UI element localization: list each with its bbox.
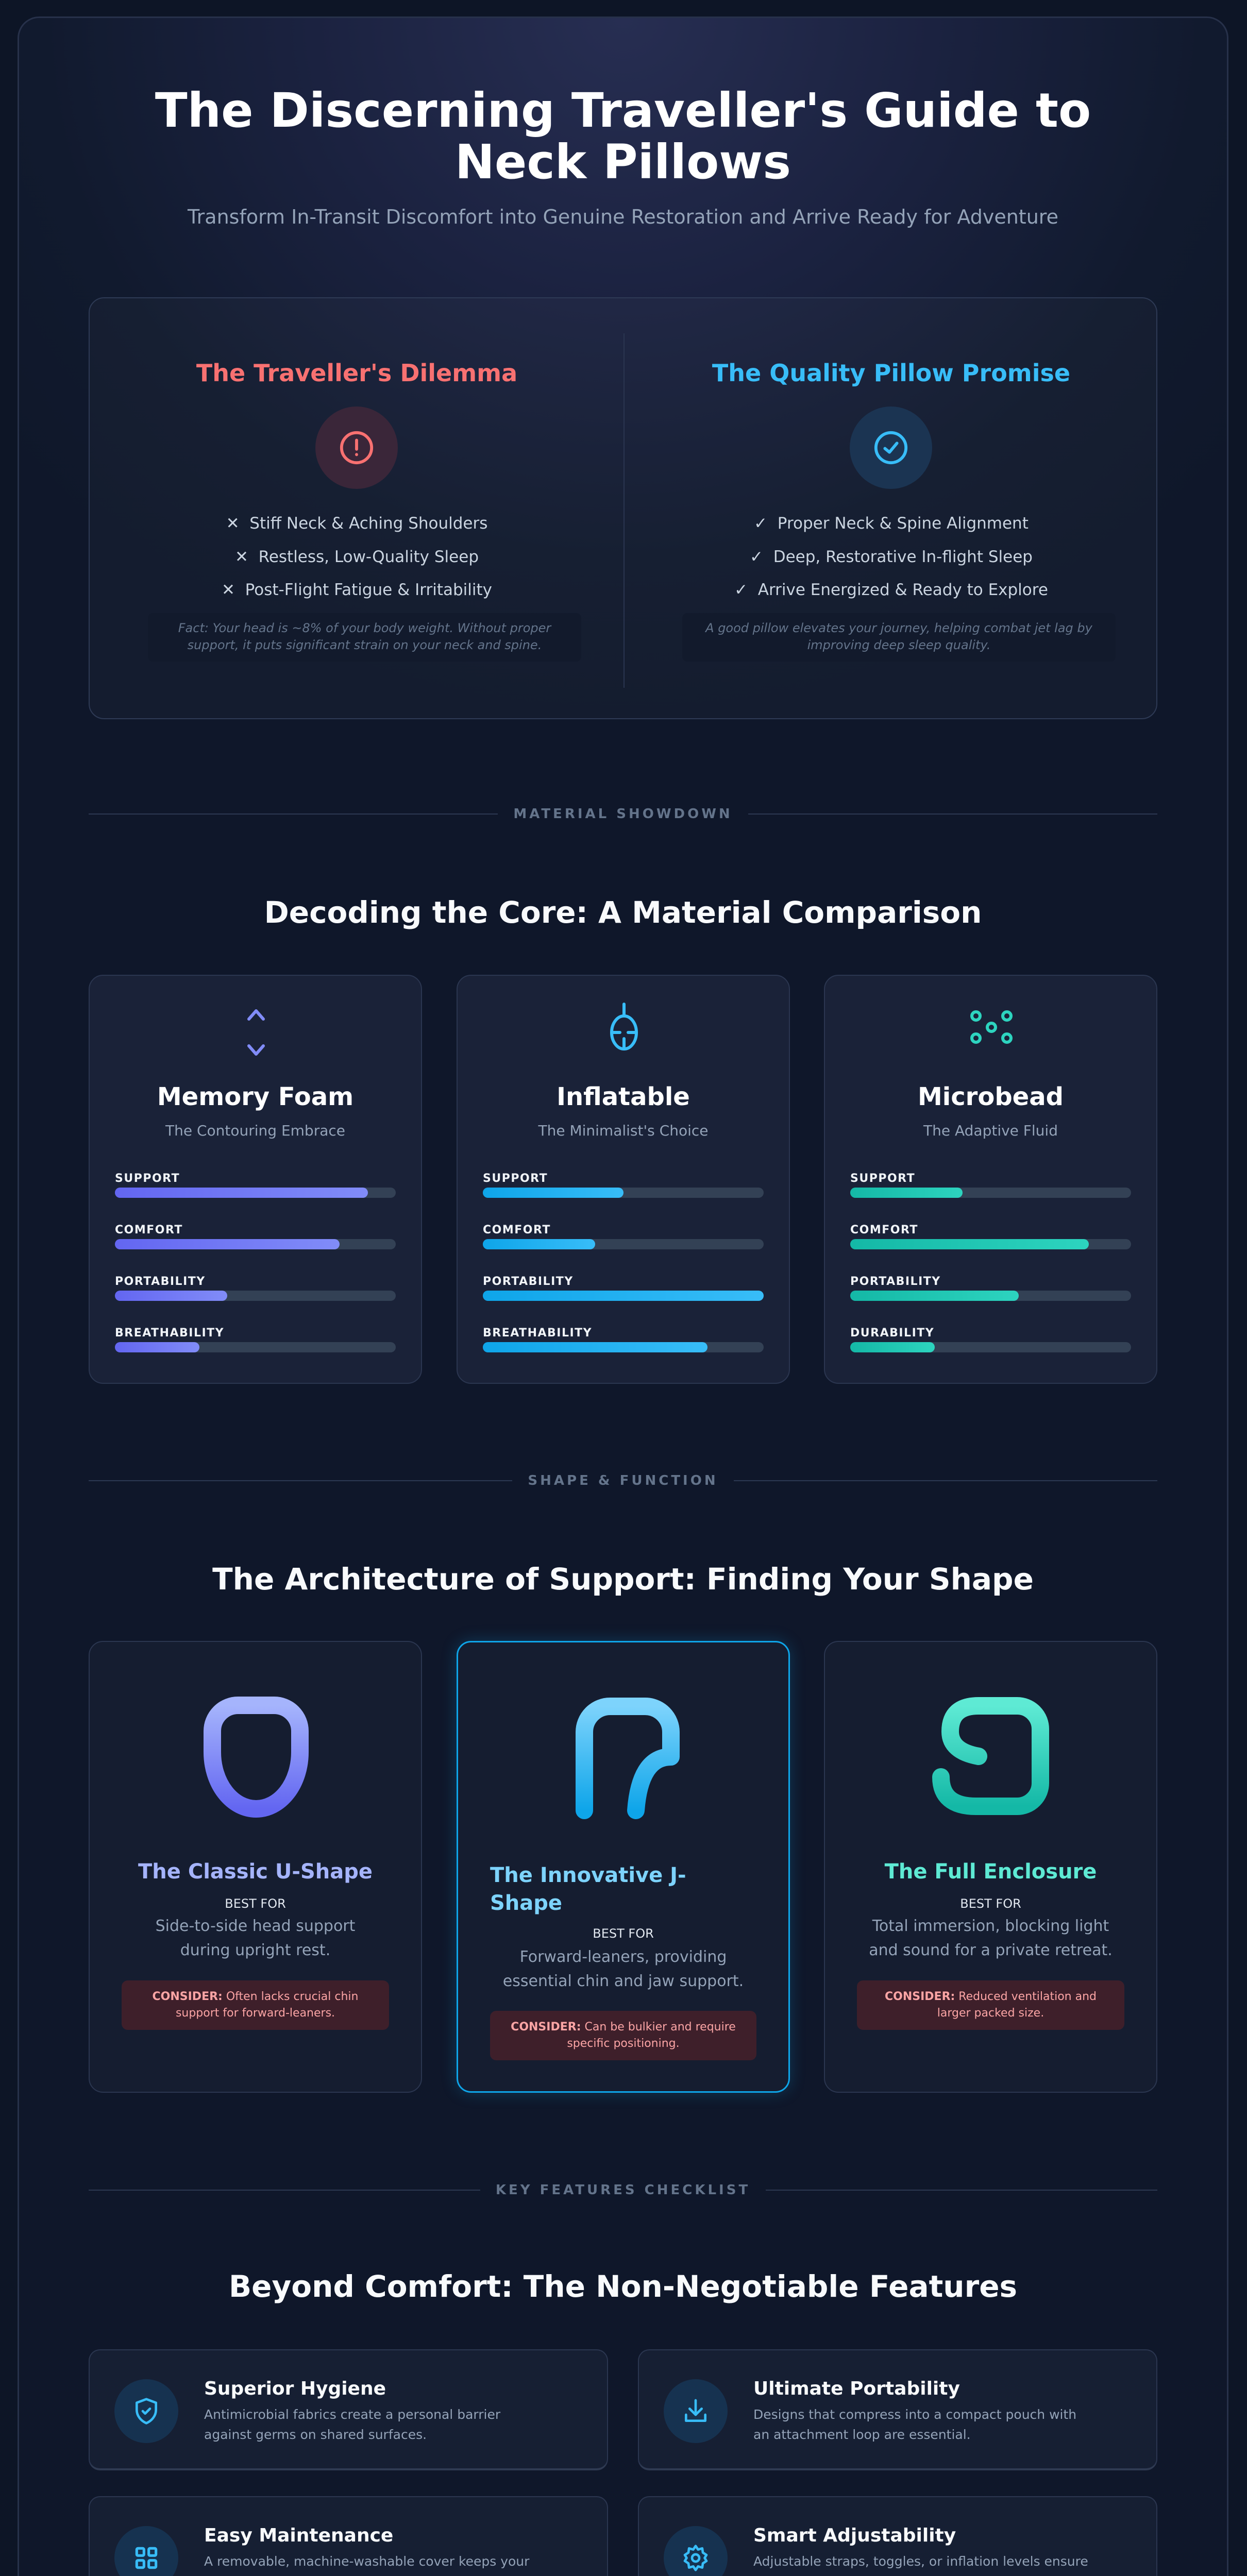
section divider: material showdown: MATERIAL SHOWDOWN — [513, 806, 733, 822]
heading: promise: The Quality Pillow Promise — [712, 359, 1070, 387]
subtitle: The Minimalist's Choice — [538, 1122, 708, 1139]
consider: support for forward-leaners. — [176, 2007, 335, 2020]
title: The Full Enclosure — [885, 1860, 1097, 1884]
list: benefits: ✓ Proper Neck & Spine Alignment — [754, 514, 1029, 533]
icon: chevrons — [247, 1009, 265, 1056]
icon: shield — [114, 2379, 178, 2443]
list: benefits — [734, 514, 1048, 599]
bars — [115, 1172, 396, 1198]
heading: features: Beyond Comfort: The Non-Negotiable Features — [229, 2269, 1017, 2304]
icon: download — [664, 2379, 728, 2443]
feature: maintenance: A removable, machine-washable cover keeps your — [204, 2554, 529, 2569]
consider: specific positioning. — [567, 2037, 680, 2050]
card: J-shape — [457, 1641, 790, 2093]
panel: dilemma vs promise — [89, 297, 1157, 719]
feature: maintenance — [89, 2496, 608, 2576]
card: memory foam: PORTABILITY — [115, 1275, 206, 1288]
consider — [490, 2011, 756, 2060]
list: problems — [222, 514, 492, 599]
icon: alert — [315, 406, 398, 489]
bars: SUPPORT — [483, 1172, 548, 1185]
list: problems: ✕ Post-Flight Fatigue & Irritability — [222, 581, 492, 599]
consider — [857, 1980, 1124, 2030]
list: benefits: ✓ Arrive Energized & Ready to Explore — [734, 581, 1048, 599]
feature: hygiene — [89, 2349, 608, 2470]
description — [869, 1917, 1113, 1959]
card: U-shape — [89, 1641, 422, 2093]
card: inflatable: BREATHABILITY — [483, 1327, 592, 1340]
icon: check — [850, 406, 932, 489]
subtitle: Transform In-Transit Discomfort into Genuine Restoration and Arrive Ready for Adventure — [188, 206, 1058, 228]
best for: BEST FOR — [960, 1896, 1021, 1911]
card: memory foam: COMFORT — [115, 1224, 183, 1236]
consider: CONSIDER: Reduced ventilation and — [885, 1990, 1097, 2003]
description: essential chin and jaw support. — [503, 1972, 744, 1990]
consider: CONSIDER: Can be bulkier and require — [511, 2021, 736, 2033]
description — [156, 1917, 355, 1959]
icon: enclosure pillow — [932, 1697, 1049, 1815]
feature: hygiene: Antimicrobial fabrics create a personal barrier — [204, 2407, 500, 2422]
card: microbead — [824, 975, 1157, 1384]
title: Shape — [490, 1891, 562, 1915]
card: microbead: DURABILITY — [850, 1327, 934, 1340]
description: during upright rest. — [180, 1941, 330, 1959]
fact box — [148, 613, 581, 662]
title — [155, 83, 1091, 190]
card: microbead: COMFORT — [850, 1224, 918, 1236]
feature: adjustability — [638, 2496, 1157, 2576]
card: memory foam — [89, 975, 422, 1384]
heading: architecture: The Architecture of Support: Finding Your Shape — [212, 1562, 1034, 1597]
subtitle: The Adaptive Fluid — [923, 1122, 1058, 1139]
feature: portability: Ultimate Portability — [753, 2378, 960, 2399]
section divider: shape & function: SHAPE & FUNCTION — [528, 1473, 718, 1488]
feature: portability: an attachment loop are essential. — [753, 2427, 971, 2442]
feature: adjustability: Smart Adjustability — [753, 2525, 956, 2546]
title: Inflatable — [557, 1082, 690, 1111]
feature: portability: Designs that compress into a compact pouch with — [753, 2407, 1076, 2422]
column: dilemma — [178, 359, 551, 652]
icon: grid — [114, 2526, 178, 2576]
icon: U pillow — [204, 1697, 309, 1818]
consider: CONSIDER: Often lacks crucial chin — [153, 1990, 358, 2003]
icon: valve — [610, 1003, 638, 1050]
list: benefits: ✓ Deep, Restorative In-flight Sleep — [750, 547, 1033, 566]
description: Side-to-side head support — [156, 1917, 355, 1935]
list: problems: ✕ Restless, Low-Quality Sleep — [235, 547, 479, 566]
title: The Discerning Traveller's Guide to — [155, 83, 1091, 138]
note box: improving deep sleep quality. — [807, 638, 990, 652]
note box — [682, 613, 1116, 662]
description: Total immersion, blocking light — [872, 1917, 1109, 1935]
consider — [122, 1980, 389, 2030]
title — [490, 1863, 686, 1915]
note box: A good pillow elevates your journey, helping combat jet lag by — [705, 621, 1092, 635]
consider: larger packed size. — [937, 2007, 1044, 2020]
bars — [850, 1172, 1131, 1198]
feature: hygiene: Superior Hygiene — [204, 2378, 386, 2399]
feature: portability — [638, 2349, 1157, 2470]
subtitle: The Contouring Embrace — [165, 1122, 345, 1139]
column: promise — [705, 359, 1092, 652]
fact box: support, it puts significant strain on your neck and spine. — [188, 638, 542, 652]
title: Neck Pillows — [455, 134, 791, 190]
description: Forward-leaners, providing — [520, 1948, 727, 1966]
title: Memory Foam — [157, 1082, 353, 1111]
title: The Classic U-Shape — [138, 1860, 373, 1884]
section divider: key features: KEY FEATURES CHECKLIST — [496, 2182, 750, 2198]
description: and sound for a private retreat. — [869, 1941, 1113, 1959]
heading: material comparison: Decoding the Core: A Material Comparison — [264, 895, 982, 930]
bars: SUPPORT — [850, 1172, 915, 1185]
card: inflatable: PORTABILITY — [483, 1275, 574, 1288]
bars — [483, 1172, 764, 1198]
title: The Innovative J- — [490, 1863, 686, 1887]
card: inflatable: COMFORT — [483, 1224, 551, 1236]
card: inflatable — [457, 975, 790, 1384]
card: memory foam: BREATHABILITY — [115, 1327, 224, 1340]
card: microbead: PORTABILITY — [850, 1275, 941, 1288]
fact box: Fact: Your head is ~8% of your body weight. Without proper — [178, 621, 551, 635]
icon: beads — [970, 1010, 1013, 1044]
list: problems: ✕ Stiff Neck & Aching Shoulders — [226, 514, 487, 533]
icon: gear — [664, 2526, 728, 2576]
feature: maintenance: Easy Maintenance — [204, 2525, 393, 2546]
description — [503, 1948, 744, 1990]
feature: hygiene: against germs on shared surfaces. — [204, 2427, 427, 2442]
best for: BEST FOR — [225, 1896, 286, 1911]
icon: J pillow — [576, 1698, 680, 1819]
title: Microbead — [918, 1082, 1064, 1111]
card: full enclosure — [824, 1641, 1157, 2093]
bars: SUPPORT — [115, 1172, 180, 1185]
feature: adjustability: Adjustable straps, toggles, or inflation levels ensure — [753, 2554, 1088, 2569]
best for: BEST FOR — [593, 1926, 654, 1941]
heading: dilemma: The Traveller's Dilemma — [196, 359, 517, 387]
